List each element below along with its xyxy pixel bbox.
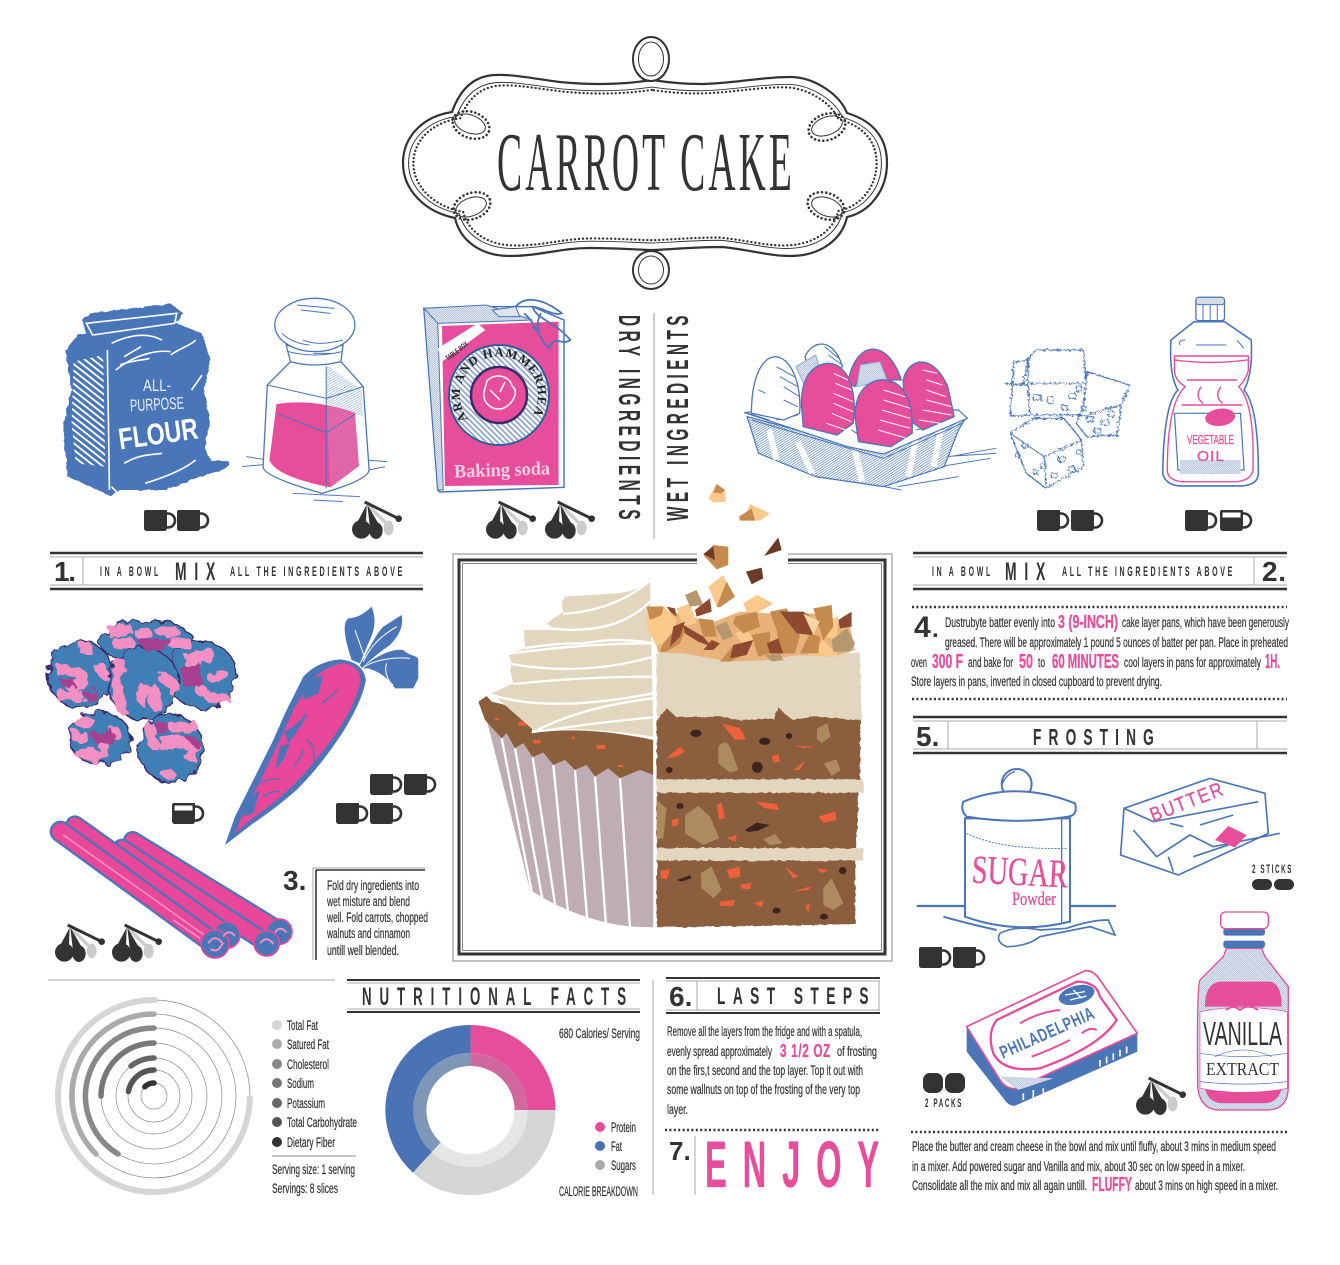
- donut chart: calorie breakdown: [399, 1039, 542, 1181]
- step 4 text: to: [1038, 655, 1045, 670]
- label: 2 packs: 2 PACKS: [925, 1096, 963, 1110]
- step 5 header: FROSTING: [1033, 724, 1161, 750]
- donut labels and legend: Fat: [611, 1139, 622, 1154]
- donut labels and legend: Protein: [611, 1120, 636, 1135]
- step 2 header: IN A BOWL: [932, 563, 993, 579]
- title banner: [403, 37, 887, 289]
- illustration: carrot: [225, 607, 418, 845]
- measure icons: sugar cups: [919, 947, 984, 968]
- measure icon: vanilla spoon: [1136, 1078, 1186, 1115]
- measure icons: carrot cups: [336, 774, 435, 824]
- infographic canvas: WET INGREDIENTS: [660, 311, 695, 521]
- step 4 text: cool layers in pans for approximately: [1124, 655, 1261, 670]
- step 6 last steps: of frosting: [837, 1044, 877, 1059]
- nutritional facts heading: NUTRITIONAL FACTS: [362, 983, 634, 1011]
- step 4 text: and bake for: [968, 655, 1013, 670]
- illustration: salt shaker: [242, 298, 387, 502]
- step 4 text: 300 F: [932, 651, 963, 673]
- step 4 text: .: [932, 616, 939, 643]
- step 3 text: well. Fold carrots, chopped: [326, 910, 428, 925]
- step 5 header: 5.: [916, 721, 939, 752]
- cupcake frosting: [492, 577, 653, 737]
- step 6 last steps: 3 1/2 OZ: [780, 1041, 831, 1061]
- donut labels and legend: Sugars: [611, 1158, 636, 1173]
- illustration: egg carton: [744, 344, 996, 490]
- nutrition legend: Cholesterol: [287, 1057, 329, 1072]
- label: 2 sticks: 2 STICKS: [1252, 862, 1293, 876]
- nutrition legend: Serving size: 1 serving: [272, 1162, 355, 1177]
- illustration: sugar jar: Powder: [1012, 889, 1056, 910]
- step 6 last steps: [666, 978, 880, 1117]
- sugar label: SUGAR: [971, 847, 1069, 896]
- illustration: vanilla bottle: EXTRACT: [1206, 1059, 1279, 1079]
- nutrition legend: Potassium: [287, 1096, 325, 1111]
- infographic canvas: DRY INGREDIENTS: [612, 315, 647, 524]
- step 1 header: ALL THE INGREDIENTS ABOVE: [230, 563, 405, 579]
- step 4 text: [911, 607, 1289, 699]
- cake crumbs: raisins: [666, 730, 846, 920]
- donut labels and legend: 680 Calories/ Serving: [559, 1026, 640, 1041]
- step 6 last steps: layer.: [667, 1102, 688, 1117]
- radial nutrition chart: [48, 980, 335, 1192]
- step 3 text: wet misture and blend: [326, 894, 410, 909]
- illustration: cupcake and layer cake: [478, 484, 863, 928]
- step 4 text: Store layers in pans, inverted in closed cupboard to prevent drying.: [911, 674, 1162, 689]
- title banner: CARROT CAKE: [497, 116, 795, 209]
- measure icons: brown sugar cups: [1037, 510, 1102, 531]
- measure icons: baking soda spoons: [486, 502, 595, 539]
- measure icons: oil cups: [1185, 510, 1251, 531]
- donut labels and legend: [559, 1026, 640, 1199]
- label: 2 sticks: [1252, 862, 1294, 890]
- step 3 text: Fold dry ingredients into: [327, 878, 419, 893]
- cake slice: [657, 653, 863, 927]
- infographic canvas: ENJOY: [705, 1127, 895, 1201]
- oil label: VEGETABLE: [1187, 432, 1234, 447]
- step 3 text: untill well blended.: [327, 943, 399, 958]
- step 5 header: [913, 717, 1287, 753]
- nutrition legend: Sodium: [287, 1076, 314, 1091]
- step 1 header: MIX: [175, 558, 223, 586]
- panel: cake frame: [453, 551, 892, 961]
- step 2 header: 2.: [1262, 556, 1286, 587]
- illustration: butter: [1121, 778, 1280, 875]
- illustration: flour bag: [63, 303, 229, 497]
- step 3 text: [283, 865, 428, 960]
- flour label: [116, 376, 201, 456]
- illustration: cinnamon sticks: [61, 825, 292, 958]
- step 6 last steps: Remove all the layers from the fridge and with a spatula,: [667, 1024, 862, 1039]
- step 4 text: 4: [914, 611, 931, 644]
- box name: Baking soda: [454, 458, 551, 483]
- step 4 text: 3 (9-INCH): [1058, 612, 1118, 632]
- step 6 last steps: 6.: [669, 981, 692, 1012]
- illustration: vegetable oil bottle: OIL: [1197, 448, 1225, 465]
- step 2 header: MIX: [1005, 558, 1053, 586]
- illustration: baking soda box: [422, 298, 572, 493]
- measure icon: salt spoon: [352, 502, 402, 539]
- measure icon: walnuts cup: [172, 803, 203, 824]
- nut topping: [647, 484, 855, 662]
- step 4 text: Dustrubyte batter evenly into: [945, 615, 1055, 630]
- step 4 text: 60 MINUTES: [1052, 651, 1119, 673]
- measure icons: flour cups: [144, 510, 208, 531]
- step 6 last steps: LAST STEPS: [717, 983, 876, 1010]
- step 1 header: IN A BOWL: [100, 563, 161, 579]
- nutrition legend: Total Fat: [287, 1018, 318, 1033]
- donut labels and legend: CALORIE BREAKDOWN: [559, 1184, 638, 1199]
- step 3 text: 3.: [283, 865, 306, 896]
- step 1 header: [50, 553, 423, 589]
- frosting method text: Consolidate all the mix and mix all again untill.: [912, 1178, 1087, 1193]
- flour label: PURPOSE: [130, 394, 184, 415]
- measure icons: cinnamon spoons: [55, 925, 162, 962]
- cupcake top: [478, 696, 653, 778]
- illustration: vegetable oil bottle: [1163, 297, 1258, 486]
- philadelphia label: PHILADELPHIA: [996, 1003, 1098, 1063]
- nutritional facts heading: [347, 980, 640, 1012]
- step 1 header: 1.: [54, 556, 76, 587]
- step 6 last steps: some wallnuts on top of the frosting of the very top: [667, 1082, 860, 1097]
- step 4 text: 50: [1019, 651, 1033, 673]
- step 4 text: oven: [911, 655, 927, 670]
- flour label: FLOUR: [116, 413, 201, 456]
- step 6 last steps: evenly spread approximately: [667, 1044, 772, 1059]
- nutrition legend: Total Carbohydrate: [287, 1115, 357, 1130]
- flour label: ALL-: [143, 376, 171, 395]
- nutrition legend: Servings: 8 slices: [272, 1181, 338, 1196]
- nutrition legend: Dietary Fiber: [287, 1135, 335, 1150]
- illustration: brown sugar blocks: [1005, 350, 1130, 488]
- illustration: walnuts: [48, 620, 237, 782]
- frosting method text: FLUFFY: [1092, 1174, 1132, 1196]
- step 4 text: 1H.: [1265, 651, 1280, 673]
- box seal: [448, 344, 550, 446]
- cake crumbs: carrot: [661, 723, 837, 913]
- cupcake liner: [487, 720, 653, 927]
- step 3 text: walnuts and cinnamon: [326, 926, 410, 941]
- nutrition legend: Satured Fat: [287, 1037, 329, 1052]
- label: 2 packs: [923, 1073, 965, 1110]
- frosting method text: [911, 1132, 1287, 1196]
- illustration: philadelphia cream cheese: [967, 971, 1137, 1106]
- butter label: BUTTER: [1147, 778, 1228, 827]
- vanilla label: VANILLA: [1203, 1015, 1282, 1052]
- illustration: sugar jar: [917, 769, 1116, 947]
- cake crumbs: walnut: [657, 723, 843, 910]
- illustration: vanilla bottle: [1197, 912, 1288, 1110]
- nutrition legend: [272, 1018, 357, 1196]
- step 7 enjoy: [665, 1127, 895, 1201]
- step 6 last steps: on the firs,t second and the top layer. Top it out with: [667, 1063, 863, 1078]
- step 2 header: [913, 553, 1287, 589]
- step 7 enjoy: 7.: [669, 1136, 691, 1166]
- box small label: TABLE BOX: [444, 339, 470, 363]
